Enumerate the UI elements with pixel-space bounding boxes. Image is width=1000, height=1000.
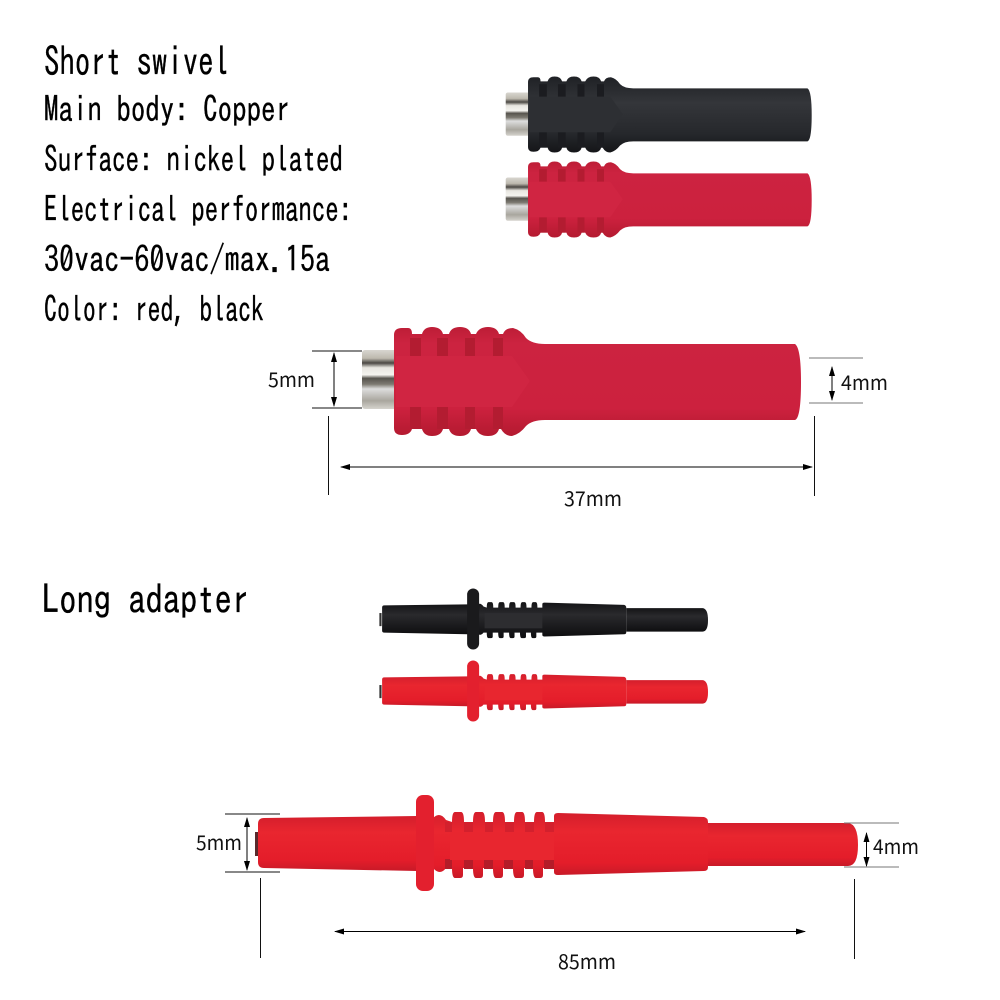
- dimension: 4mm long adapter: [844, 823, 919, 867]
- text block: specifications: Surface: nickel plated: [44, 141, 343, 177]
- photo: large red short swivel plug: [362, 327, 801, 436]
- text block: specifications: Electrical performance:: [44, 191, 352, 227]
- title: short swivel: Short swivel: [44, 41, 229, 81]
- dimension: 4mm short swivel: [809, 358, 888, 403]
- text block: specifications: Color: red, black: [44, 291, 264, 327]
- photo: black short swivel plug: [506, 77, 812, 152]
- photo: red short swivel plug: [506, 162, 812, 237]
- dimension: 85mm length: [260, 878, 854, 975]
- title: long adapter: Long adapter: [42, 579, 249, 619]
- dimension: 4mm long adapter: 4mm: [873, 831, 919, 860]
- text block: specifications: [44, 91, 352, 327]
- text block: specifications: Main body: Copper: [44, 91, 290, 127]
- dimension: 37mm length: [328, 416, 814, 512]
- dimension: 4mm short swivel: 4mm: [841, 367, 888, 396]
- dimension: 5mm short swivel: [268, 351, 362, 408]
- dimension: 5mm short swivel: 5mm: [268, 364, 315, 393]
- dimension: 5mm long adapter: 5mm: [196, 827, 242, 856]
- text block: specifications: 30vac-60vac/max.15a: [44, 241, 330, 277]
- dimension: 85mm length: 85mm: [558, 946, 616, 975]
- dimension: 5mm long adapter: [196, 814, 280, 872]
- photo: large red long adapter: [255, 795, 858, 891]
- photo: black long adapter: [379, 589, 708, 650]
- photo: red long adapter: [379, 661, 708, 722]
- dimension: 37mm length: 37mm: [564, 483, 622, 512]
